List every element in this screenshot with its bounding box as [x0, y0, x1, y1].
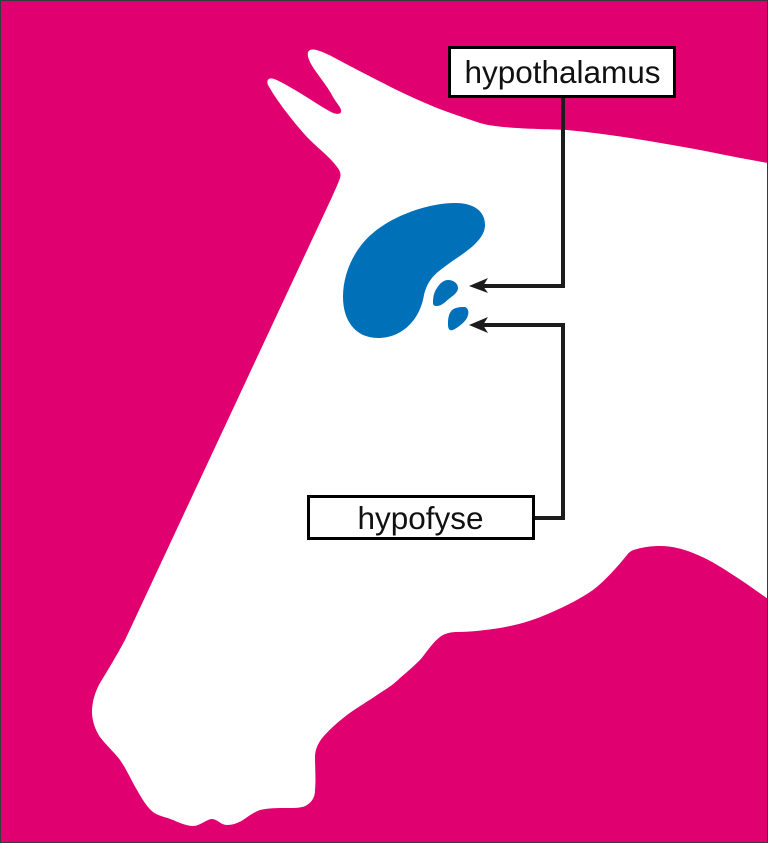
blue hypofyse lower lobe [448, 307, 468, 330]
label: hypofyse [308, 496, 534, 538]
label: hypothalamus: hypothalamus [464, 54, 661, 90]
blue hypothalamus shape [343, 203, 485, 338]
arrow: hypofyse to gland [469, 317, 563, 518]
label: hypofyse: hypofyse [357, 500, 484, 536]
label: hypothalamus [450, 48, 674, 96]
blue hypofyse upper lobe [433, 280, 458, 306]
arrow: hypothalamus to gland [469, 97, 563, 293]
